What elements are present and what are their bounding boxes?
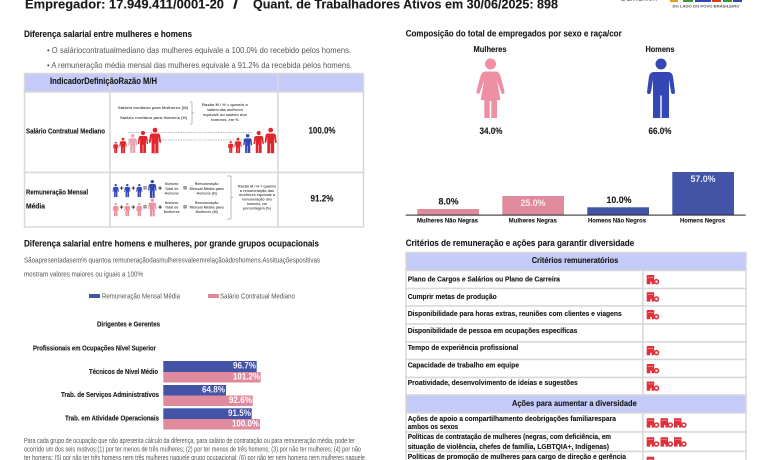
illustration: average pay formula: Mensal Média para <box>190 206 225 210</box>
illustration: average pay formula: mulheres equivale à <box>239 193 275 197</box>
table header <box>24 74 364 92</box>
table row: specific occupations <box>406 324 746 342</box>
illustration: average pay formula: = <box>183 204 187 212</box>
bar chart: sex and race: Mulheres Negras <box>509 218 557 224</box>
icon: woman: Mulheres <box>474 45 507 54</box>
illustration: average pay formula: Total de <box>165 187 178 191</box>
icon: man: 66.0% <box>648 126 672 136</box>
illustration: median salary figures: Salário mediano para Mulheres (M) <box>118 106 189 110</box>
bullet: contractual salary: • O saláriocontratualmediano das mulheres equivale a 100.0% do recebido pelos homens. <box>47 45 351 55</box>
heading: composition: Composição do total de empregados por sexo e raça/cor <box>406 28 622 40</box>
heading: criteria: Critérios de remuneração e ações para garantir diversidade <box>406 238 634 249</box>
bullet: average pay: • A remuneração média mensal das mulheres equivale a 91.2% da recebida pelos homens. <box>47 60 352 70</box>
logos top right <box>621 0 742 8</box>
illustration: average pay formula: = <box>183 186 187 192</box>
illustration: average pay formula: Número <box>165 182 179 186</box>
illustration: average pay formula: Mensal Média para <box>190 187 225 191</box>
illustration: median salary figures: salário das mulheres <box>207 108 243 112</box>
legend: Salário Contratual Mediano <box>220 292 295 300</box>
table row: experience: Tempo de experiência profissional <box>408 343 518 352</box>
bar chart: sex and race: 8.0% <box>438 197 458 207</box>
footnote: ocorrido um dos seis motivos:(1) por ter menos de três mulheres; (2) por ter menos de três homens; (3) por não ter mulheres; (4) por não <box>24 444 361 454</box>
illustration: average pay formula: + <box>131 186 135 192</box>
bar chart: sex and race: Mulheres Não Negras <box>417 218 478 224</box>
table row: hiring policies: Políticas de contratação de mulheres (negras, com deficiência, em <box>408 432 611 441</box>
illustration: average pay formula: Homens (H) <box>197 192 218 196</box>
illustration: average pay formula <box>113 176 277 219</box>
illustration: average pay formula: remuneração dos <box>242 197 272 201</box>
table row: hiring policies: situação de violência, chefes de família, LGBTQIA+, Indígenas) <box>408 442 610 451</box>
bar chart: occupational groups: Trab. de Serviços Administrativos <box>61 390 159 399</box>
table header: remuneration criteria: Critérios remuneratórios <box>532 256 619 265</box>
illustration: average pay formula: Remuneração <box>195 182 219 186</box>
illustration: average pay formula: + <box>158 186 162 192</box>
illustration: average pay formula: a remuneração das <box>240 189 274 193</box>
bar chart: occupational groups: 96.7% <box>233 360 256 372</box>
heading: salary difference: Diferença salarial entre mulheres e homens <box>24 29 192 40</box>
bar chart: occupational groups: 91.5% <box>228 408 251 419</box>
bar chart: sex and race: 10.0% <box>606 195 632 205</box>
table row: family obligations <box>406 413 746 432</box>
bar chart: sex and race: Homens Negros <box>680 218 725 224</box>
panel: occupational groups <box>24 238 365 460</box>
icon: man: Homens <box>646 45 675 54</box>
bar chart: occupational groups: 100.0% <box>232 418 259 430</box>
header: employer and workers <box>25 0 558 12</box>
heading: occupational groups: Diferença salarial entre homens e mulheres, por grande grupos ocupacionais <box>24 238 319 250</box>
panel: workforce composition <box>406 28 746 224</box>
bar chart: sex and race <box>406 172 746 224</box>
description text: Sãoapresentadasem% quantoa remuneraçãodasmulheresvaleemrelaçãoàdoshomens.Assituaçõespositivas <box>24 256 320 264</box>
table row: hiring policies <box>406 432 746 452</box>
table row: overtime availability: Disponibilidade para horas extras, reuniões com clientes e viagens <box>408 309 622 318</box>
bar chart: occupational groups: Dirigentes e Gerentes <box>97 320 160 328</box>
icon: woman <box>474 45 507 136</box>
table row: family obligations: Ações de apoio a compartilhamento deobrigações familiarespara <box>408 414 617 423</box>
bar chart: occupational groups: 101.2% <box>233 372 260 382</box>
bar chart: sex and race: 57.0% <box>690 174 716 184</box>
bar chart: occupational groups: Profissionais em Ocupações Nível Superior <box>33 344 156 352</box>
illustration: median salary figures: Razão M / H = quanto o <box>202 103 249 107</box>
illustration: median salary figures <box>113 102 277 153</box>
table row: experience <box>406 342 746 360</box>
description text: mostram valores maiores ou iguais a 100% <box>24 270 143 278</box>
illustration: median salary figures: Salário mediano para Homens (H) <box>120 116 188 120</box>
bar chart: occupational groups <box>33 320 261 430</box>
illustration: average pay formula: + <box>158 204 162 212</box>
illustration: average pay formula: Remuneração <box>195 201 219 205</box>
illustration: average pay formula: Mulheres (M) <box>196 210 219 214</box>
table row: promotion policies <box>406 452 746 460</box>
table header: remuneration criteria <box>406 252 746 270</box>
footnote <box>24 436 365 460</box>
table row: teamwork <box>406 360 746 378</box>
table row: overtime availability <box>406 306 746 324</box>
table row: average monthly pay: Remuneração Mensal <box>26 188 88 196</box>
illustration: average pay formula: + <box>119 204 124 212</box>
illustration: average pay formula: Número <box>165 201 179 205</box>
illustration: average pay formula: + <box>119 186 124 192</box>
panel: salary difference table <box>24 29 364 227</box>
table row: family obligations: ambos os sexos <box>408 422 458 431</box>
table row: career plan: Plano de Cargos e Salários ou Plano de Carreira <box>408 274 561 284</box>
bar chart: occupational groups: 92.6% <box>229 395 252 406</box>
table row: specific occupations: Disponibilidade de pessoa em ocupações específicas <box>408 326 577 335</box>
bar chart: occupational groups: Técnicos de Nível Médio <box>89 367 158 376</box>
illustration: average pay formula: = <box>143 186 147 192</box>
table row: career plan <box>406 270 746 288</box>
illustration: average pay formula: homens, em <box>247 202 267 206</box>
table header: IndicadorDefiniçãoRazão M/H <box>50 76 157 86</box>
legend: Remuneração Mensal Média <box>102 292 181 300</box>
panel: remuneration criteria and diversity actions <box>406 238 746 460</box>
illustration: average pay formula: + <box>131 204 135 212</box>
bar chart: sex and race: Homens Não Negros <box>588 218 646 224</box>
table row: contractual median salary: 100.0% <box>308 126 336 136</box>
table row: proactivity: Proatividade, desenvolvimento de ideias e sugestões <box>408 378 578 387</box>
table row: teamwork: Capacidade de trabalho em equipe <box>408 360 519 370</box>
illustration: average pay formula: Homens <box>165 192 179 196</box>
legend <box>89 292 295 300</box>
illustration: median salary figures: equivale ao salário dos <box>203 113 247 117</box>
table row: average monthly pay: 91.2% <box>310 194 334 204</box>
illustration: average pay formula: = <box>143 204 147 212</box>
table row: production goals: Cumprir metas de produção <box>408 292 497 301</box>
table row: average monthly pay <box>24 172 364 227</box>
logos top right: DO LADO DO POVO BRASILEIRO <box>672 4 740 8</box>
table header: diversity actions <box>406 395 746 413</box>
bar chart: sex and race: 25.0% <box>520 198 546 208</box>
illustration: average pay formula: Razão M / H = quanto <box>238 185 277 189</box>
description text <box>24 256 320 278</box>
table row: contractual median salary: Salário Contratual Mediano <box>26 126 105 136</box>
icon: man <box>646 45 675 136</box>
icon: woman: 34.0% <box>480 126 502 136</box>
table row: contractual median salary <box>24 92 364 172</box>
table row: production goals <box>406 288 746 306</box>
footnote: Para cada grupo de ocupação que não apresenta cálculo da diferença, para salário de contratação ou para remuneração média, pode ter <box>24 436 355 445</box>
table row: proactivity <box>406 378 746 395</box>
table row: average monthly pay: Média <box>26 202 46 210</box>
illustration: average pay formula: Total de <box>165 206 178 210</box>
table header: diversity actions: Ações para aumentar a diversidade <box>512 399 637 408</box>
bar chart: occupational groups: Trab. em Atividade Operacionais <box>65 414 159 422</box>
illustration: median salary figures: homens, em % <box>211 118 240 122</box>
bar chart: occupational groups: 64.8% <box>202 384 225 396</box>
illustration: average pay formula: Mulheres <box>164 210 180 214</box>
illustration: average pay formula: porcentagem (%) <box>243 206 272 210</box>
